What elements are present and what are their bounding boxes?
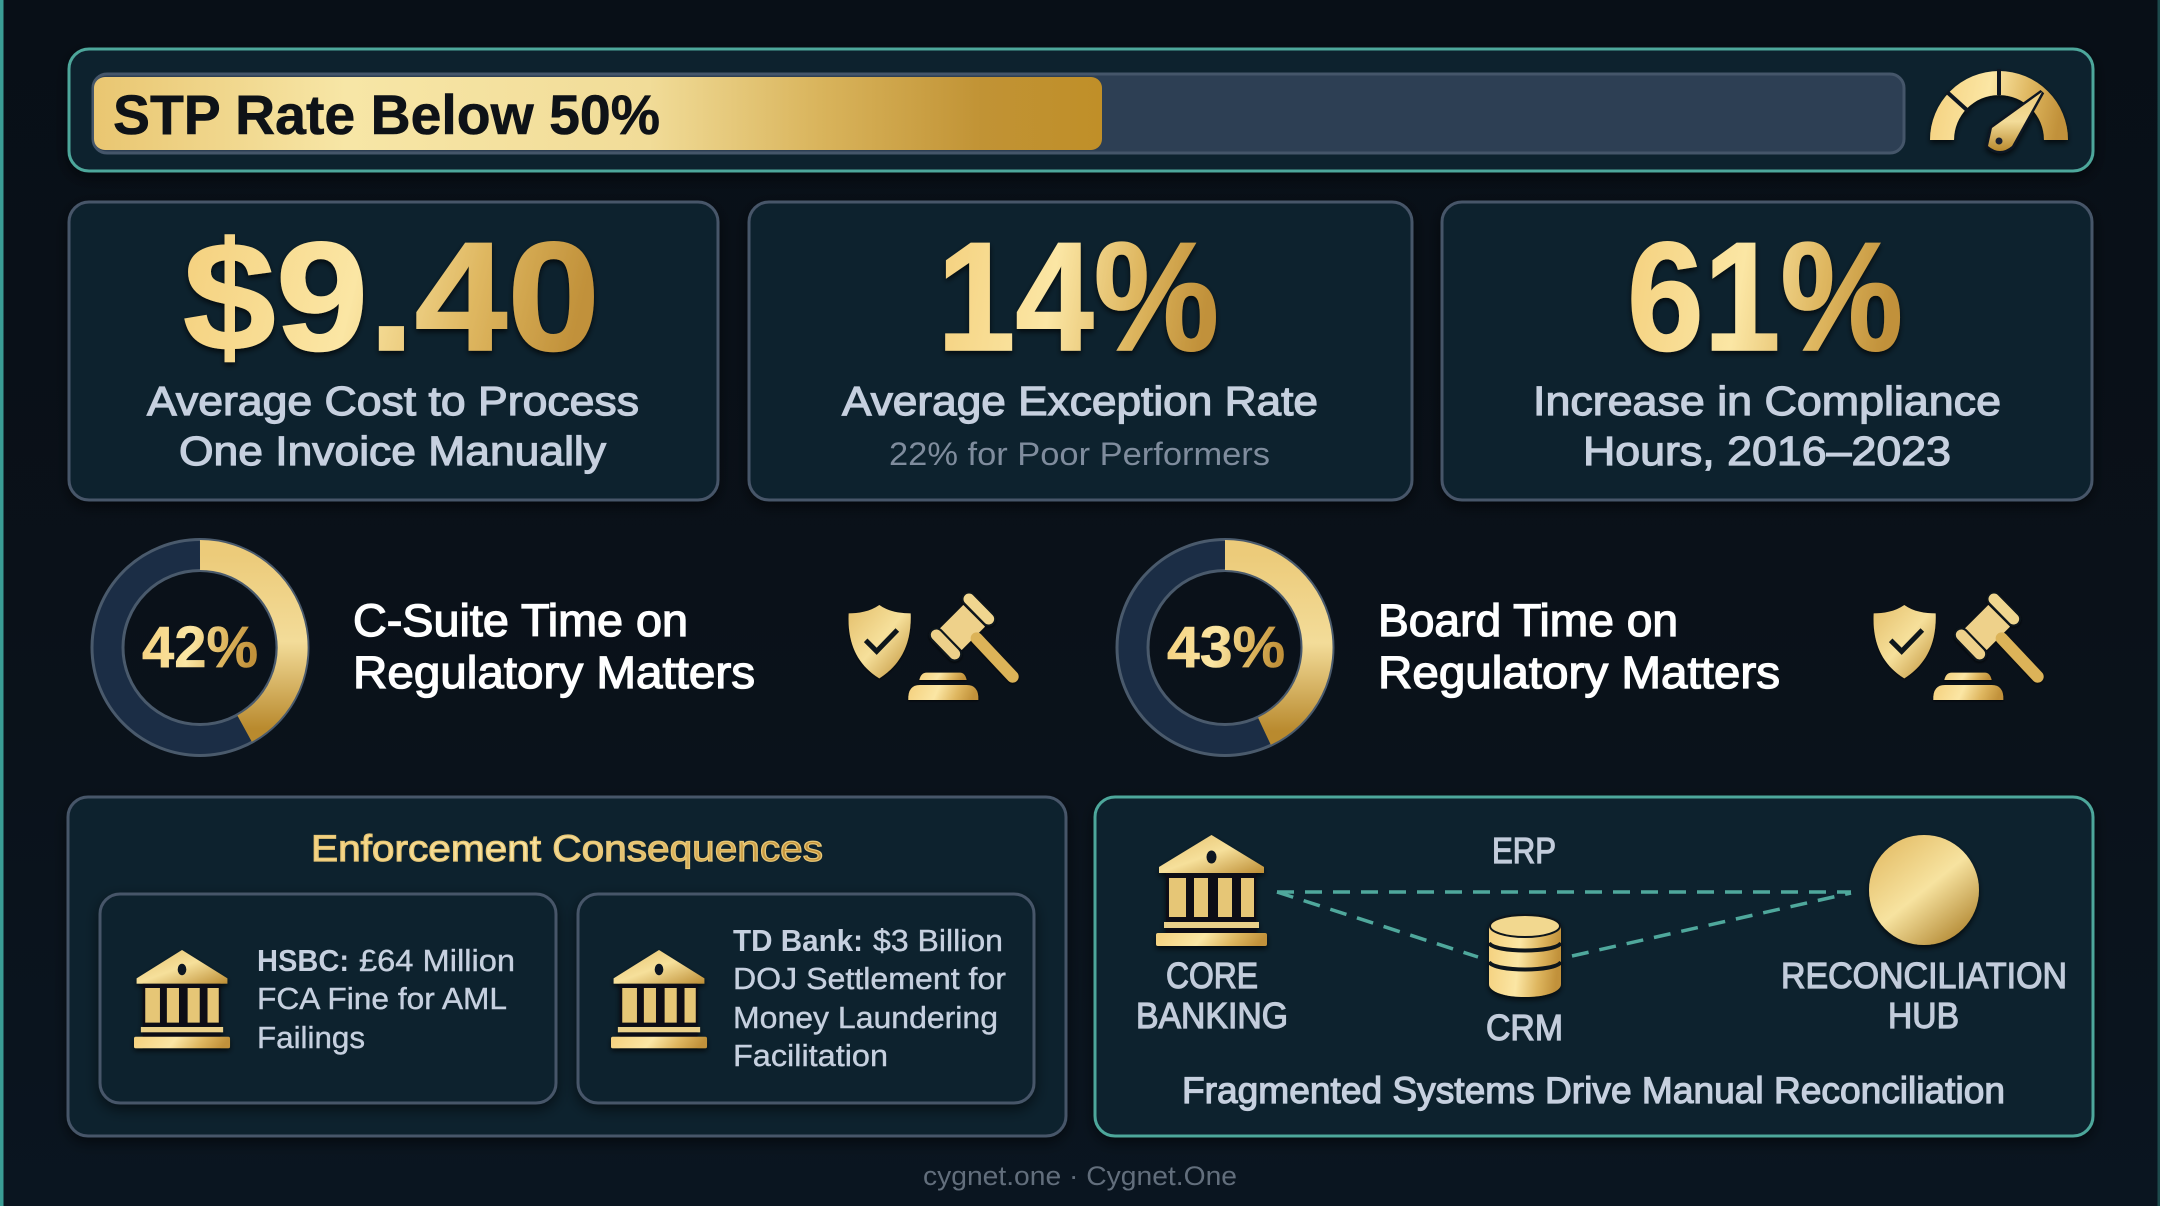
text: TD Bank settlement: Facilitation (733, 1038, 888, 1073)
heading: STP rate: STP Rate Below 50% (113, 83, 660, 146)
text: HSBC fine (257, 943, 515, 1055)
label: core banking (1136, 955, 1288, 1036)
card: HSBC (100, 894, 556, 1103)
progress bar fill (94, 77, 1102, 150)
stat: $9.40: $9.40 (183, 210, 600, 383)
panel: exception rate (749, 202, 1412, 500)
text: HSBC fine: HSBC: (257, 943, 349, 978)
icon: bank (134, 950, 230, 1048)
label: cost: Average Cost to Process (147, 378, 639, 424)
label: reconciliation hub (1781, 955, 2067, 1036)
text: C-suite time (353, 595, 755, 698)
text: TD Bank settlement: $3 Billion (873, 923, 1003, 958)
icon: shield and gavel (849, 599, 1013, 700)
label: CRM: CRM (1486, 1007, 1563, 1048)
donut: C-suite 42% (92, 540, 308, 756)
label: ERP: ERP (1492, 830, 1556, 871)
label: compliance: Hours, 2016–2023 (1583, 428, 1951, 474)
card: TD Bank (578, 894, 1034, 1103)
label: reconciliation hub: RECONCILIATION (1781, 955, 2067, 996)
stat: 61%: 61% (1627, 210, 1903, 383)
icon: gauge (1930, 69, 2068, 151)
label: compliance: Increase in Compliance (1533, 378, 2001, 424)
text: board time: Board Time on (1378, 595, 1678, 646)
icon: core banking (1156, 835, 1267, 946)
text: board time (1378, 595, 1780, 698)
label: exception rate: Average Exception Rate (842, 378, 1318, 424)
donut: board 43% (1117, 540, 1333, 756)
panel: enforcement consequences (68, 797, 1066, 1136)
label: cost: One Invoice Manually (179, 428, 607, 474)
text: C-suite time: Regulatory Matters (353, 647, 755, 698)
panel: fragmented systems (1095, 797, 2093, 1136)
label: reconciliation hub: HUB (1888, 995, 1959, 1036)
text: C-suite time: C-Suite Time on (353, 595, 688, 646)
value: 42%: 42% (142, 615, 258, 680)
label: cost (147, 378, 639, 474)
text: TD Bank settlement (733, 923, 1006, 1073)
text: TD Bank settlement: DOJ Settlement for (733, 961, 1006, 996)
progress bar track (93, 74, 1904, 153)
panel: compliance hours (1442, 202, 2092, 500)
text: TD Bank settlement: TD Bank: (733, 923, 863, 958)
icon: reconciliation hub coin (1869, 835, 1979, 945)
icon: bank (611, 950, 707, 1048)
text: HSBC fine: Failings (257, 1020, 365, 1055)
sublabel: poor performers: 22% for Poor Performers (889, 436, 1270, 472)
caption: fragmented systems: Fragmented Systems Drive Manual Reconciliation (1182, 1070, 2005, 1111)
text: HSBC fine: FCA Fine for AML (257, 981, 507, 1016)
label: compliance (1533, 378, 2001, 474)
icon: shield and gavel (1874, 599, 2038, 700)
text: board time: Regulatory Matters (1378, 647, 1780, 698)
heading: enforcement: Enforcement Consequences (311, 828, 823, 869)
icon: database (1489, 915, 1561, 997)
label: core banking: CORE (1166, 955, 1258, 996)
footer: cygnet.one · Cygnet.One (923, 1161, 1237, 1191)
text: TD Bank settlement: Money Laundering (733, 1000, 998, 1035)
stat: 14%: 14% (937, 210, 1219, 383)
connectors: dashed lines (1277, 892, 1851, 957)
label: core banking: BANKING (1136, 995, 1288, 1036)
text: HSBC fine: £64 Million (359, 943, 515, 978)
panel: STP rate progress (69, 49, 2093, 171)
value: 43%: 43% (1167, 615, 1285, 680)
panel: cost per invoice (69, 202, 718, 500)
